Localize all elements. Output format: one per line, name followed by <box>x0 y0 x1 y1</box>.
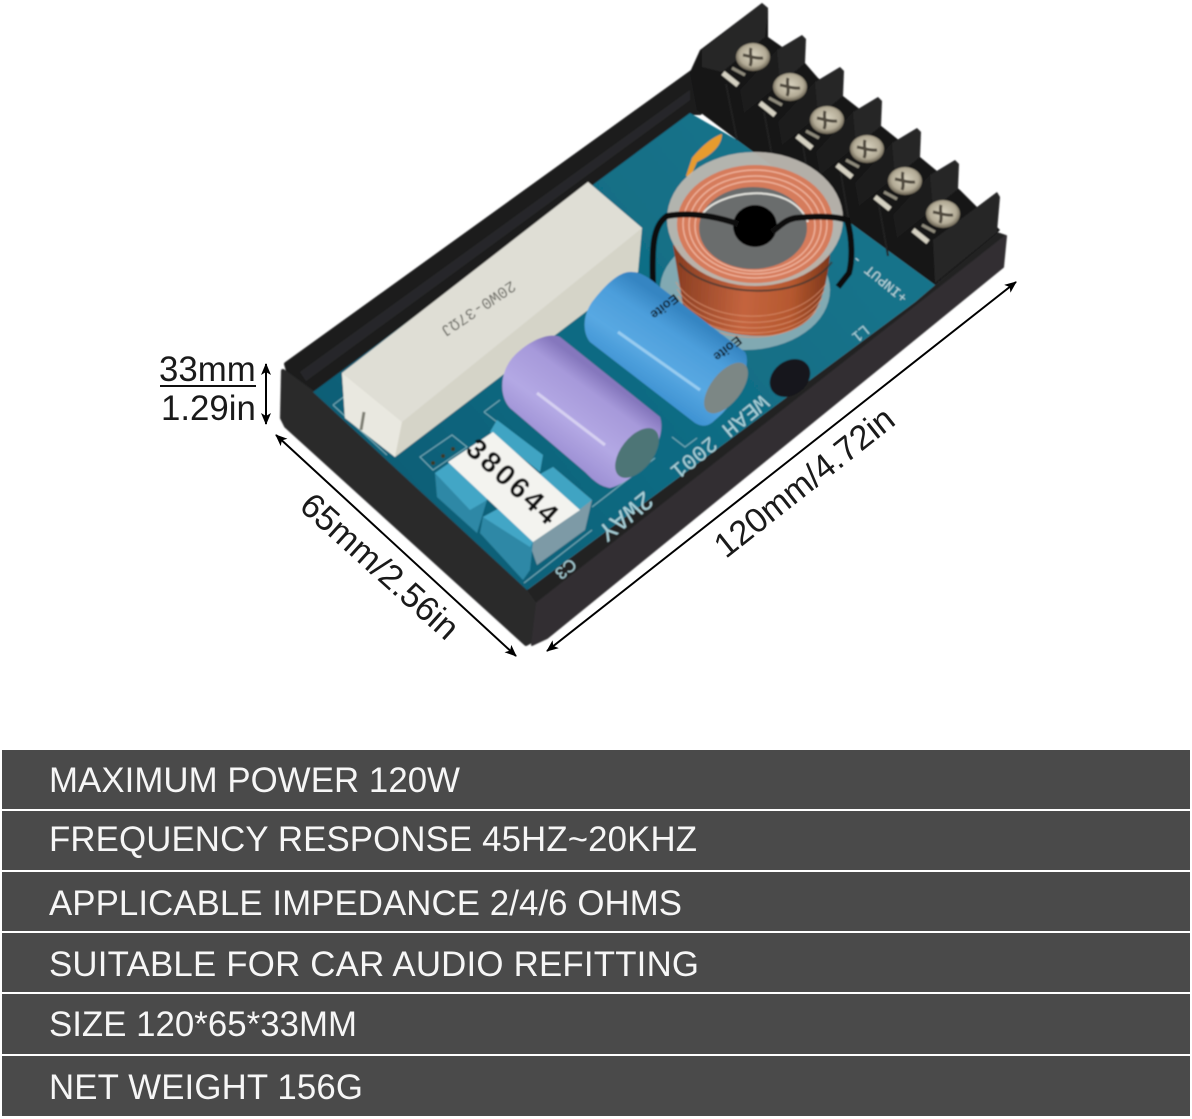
coil: winding lines <box>676 282 826 337</box>
spec row: net weight <box>2 1056 1190 1116</box>
spec row: frequency response <box>2 811 1190 870</box>
width arrow <box>276 435 516 656</box>
resistor: end face <box>342 373 402 457</box>
blue capacitor body <box>585 272 747 426</box>
resistor: marking: 20W0-37ΩJ <box>437 276 519 339</box>
length arrow <box>547 282 1016 651</box>
terminal ridges between screws <box>740 50 933 238</box>
board text: INPUT: +INPUT - <box>849 250 912 305</box>
spec row: maximum power <box>2 750 1190 809</box>
film capacitor: front left <box>435 452 487 533</box>
dimension: length <box>547 282 1016 651</box>
purple capacitor body <box>502 336 661 488</box>
coil: lower clear flange <box>660 230 830 350</box>
number label text: 380644 <box>460 433 566 533</box>
board mounting post <box>762 351 818 405</box>
coil: top clear flange <box>667 152 843 286</box>
spec row: size <box>2 994 1190 1054</box>
coil: copper top ring <box>677 165 833 283</box>
film capacitor: back right <box>530 467 592 565</box>
product photo: crossover board <box>282 3 1006 645</box>
coil: cable tie <box>653 214 851 287</box>
housing: back wall <box>286 66 700 393</box>
spec row: applicable impedance: APPLICABLE IMPEDANCE 2/4/6 OHMS <box>49 884 682 923</box>
length label: 120mm/4.72in <box>707 400 902 566</box>
board text: 2WAY: 2WAY <box>591 484 659 547</box>
blue electrolytic capacitor: Eoite <box>711 333 745 365</box>
air-core coil <box>653 152 851 350</box>
number label background <box>448 432 580 542</box>
housing: right outer face <box>532 236 1006 645</box>
dimension: width <box>276 435 516 656</box>
terminal fins <box>702 3 1000 283</box>
blue capacitor end cap <box>696 355 756 421</box>
coil: copper winding body <box>673 245 830 336</box>
resistor: lead <box>361 412 364 430</box>
spec row: net weight: NET WEIGHT 156G <box>49 1068 363 1107</box>
purple capacitor highlight <box>537 393 605 445</box>
board text: C3: C3 <box>551 555 580 583</box>
small orange capacitor <box>686 134 722 178</box>
film capacitors with number label <box>435 420 592 580</box>
housing: left outer face <box>282 371 537 644</box>
height fraction line <box>160 385 256 387</box>
coil: centre hole <box>733 205 777 247</box>
width label: 65mm/2.56in <box>293 486 466 648</box>
spec row: applicable impedance <box>2 872 1190 931</box>
board silk-screen outlines <box>333 396 697 583</box>
board text: WEAH 2001: WEAH 2001 <box>665 389 773 483</box>
blue electrolytic capacitor <box>585 272 756 426</box>
spec row: car audio <box>2 933 1190 992</box>
film capacitor: front right <box>480 505 533 580</box>
terminal block <box>690 3 1000 285</box>
purple capacitor end cap <box>607 420 667 486</box>
dimension: height <box>159 350 266 428</box>
terminal block body <box>690 3 1000 285</box>
spec row: frequency response: FREQUENCY RESPONSE 45HZ~20KHZ <box>49 820 697 859</box>
blue capacitor brand: Eoite <box>648 291 682 323</box>
resistor: front and side body <box>342 182 642 457</box>
housing: right wall top <box>527 232 1006 604</box>
circuit board <box>313 113 935 590</box>
coil: flange shadow edge <box>679 262 832 291</box>
film capacitor: back top <box>490 420 543 472</box>
housing: back wall rim shading <box>300 90 690 381</box>
specification table <box>2 750 1190 1116</box>
spec row: size: SIZE 120*65*33MM <box>49 1005 357 1044</box>
blue capacitor highlight <box>618 332 700 390</box>
height arrow <box>265 364 267 424</box>
board pads <box>431 447 455 465</box>
purple electrolytic capacitor <box>502 336 667 488</box>
resistor: top face <box>342 182 642 422</box>
spec row: car audio: SUITABLE FOR CAR AUDIO REFITTING <box>49 945 699 984</box>
board text: L1: L1 <box>849 322 872 345</box>
coil: grey core <box>699 187 807 269</box>
screw terminals <box>723 43 960 242</box>
ceramic power resistor <box>342 182 642 457</box>
terminal front-face dividers <box>726 84 888 256</box>
height value inches: 1.29in <box>161 389 256 428</box>
spec row: maximum power: MAXIMUM POWER 120W <box>49 761 460 800</box>
height value mm: 33mm <box>159 350 256 389</box>
